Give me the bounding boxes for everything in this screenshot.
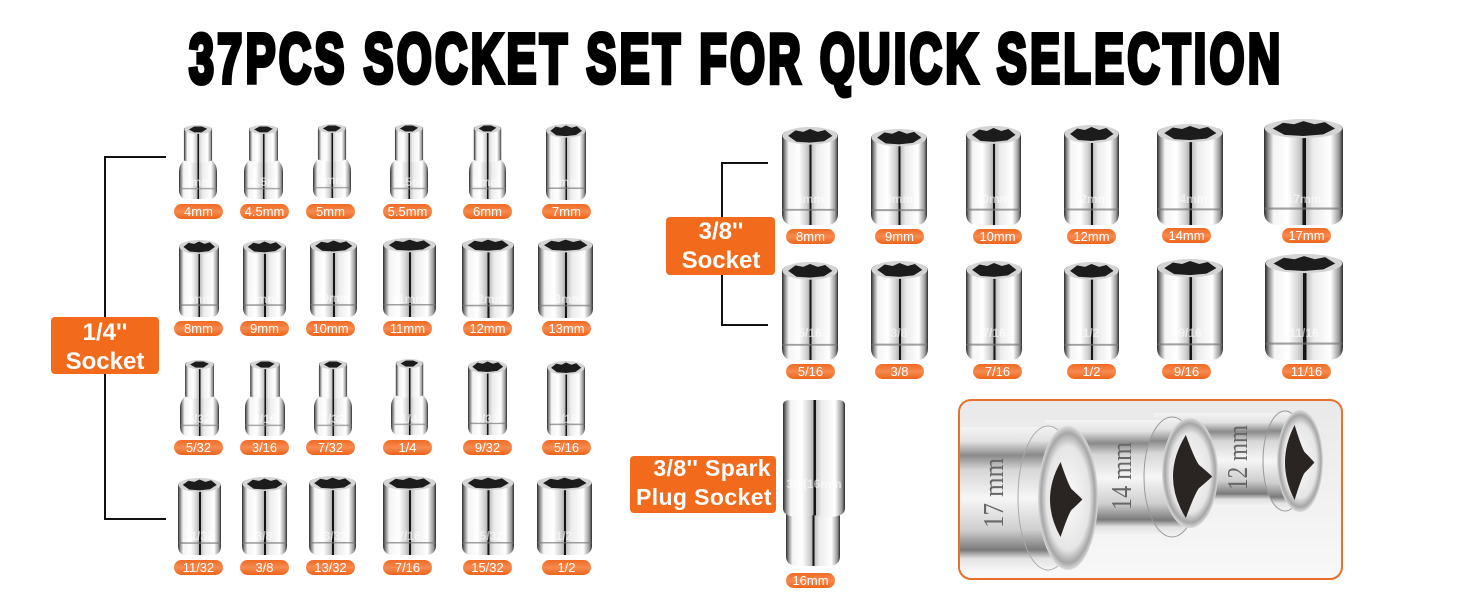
socket 12mm: 12mm <box>471 292 505 306</box>
socket 14mm large: 14mm <box>1173 192 1207 206</box>
socket 5.5mm: 5.5mm <box>388 204 427 219</box>
socket 1/4: 1/4 <box>401 412 418 426</box>
socket 7mm: 7mm <box>552 204 581 219</box>
socket 11mm: 11mm <box>390 321 425 336</box>
socket 3/16: 3/16 <box>252 440 277 455</box>
label: 1/4 inch socket: 1/4'' <box>83 319 127 346</box>
socket 3/8 large: 3/8 <box>891 326 908 340</box>
socket 5/32: 5/32 <box>187 412 211 426</box>
socket 4mm: 4mm <box>184 204 213 219</box>
socket 15/32: 15/32 <box>471 560 504 575</box>
socket 11/32: 11/32 <box>183 560 214 575</box>
socket 8mm large: 8mm <box>796 229 825 244</box>
socket 7/32: 7/32 <box>321 412 345 426</box>
socket 9/16 large: 9/16 <box>1178 326 1202 340</box>
socket 6mm: 6mm <box>473 175 501 189</box>
socket 5/16: 5/16 <box>554 412 578 426</box>
socket 5mm <box>306 124 355 219</box>
socket 9mm large: 9mm <box>885 192 913 206</box>
photo panel: socket close-up <box>959 400 1342 579</box>
socket 10mm: 10mm <box>316 291 350 305</box>
socket 11mm <box>383 238 436 336</box>
close-up socket 17mm <box>960 426 1098 570</box>
socket 13/32: 13/32 <box>317 529 347 543</box>
socket 3/16 <box>240 360 289 455</box>
socket 5/16 large <box>782 262 838 379</box>
socket 7/16 large <box>966 261 1022 379</box>
socket 7mm <box>542 124 591 219</box>
socket 17mm large: 17mm <box>1288 228 1325 243</box>
socket 3/8 large <box>871 261 928 379</box>
label: 1/4 inch socket <box>51 317 159 375</box>
bracket: 3/8 inch group <box>722 163 768 325</box>
socket 5/16 large: 5/16 <box>798 326 822 340</box>
socket 5/16: 5/16 <box>554 440 579 455</box>
socket 3/16: 3/16 <box>253 412 277 426</box>
socket 11/16 large: 11/16 <box>1289 326 1319 340</box>
socket 5/32 <box>174 360 223 455</box>
close-up socket 14mm: 14 mm <box>1107 442 1138 510</box>
socket 9mm <box>240 240 289 336</box>
socket 10mm large: 10mm <box>979 229 1016 244</box>
label: 3/8 inch spark plug socket <box>630 455 776 513</box>
socket 5.5mm <box>383 124 432 219</box>
socket 1/2 large: 1/2 <box>1082 364 1101 379</box>
socket 7mm: 7mm <box>552 175 580 189</box>
socket 1/2 large: 1/2 <box>1083 326 1100 340</box>
socket 11mm: 11mm <box>392 292 426 306</box>
close-up socket 12mm <box>1153 410 1323 512</box>
socket 7/16 large: 7/16 <box>985 364 1010 379</box>
socket 8mm: 8mm <box>185 292 213 306</box>
socket 12mm large <box>1064 125 1119 244</box>
socket 10mm: 10mm <box>312 321 349 336</box>
socket 12mm large: 12mm <box>1074 192 1108 206</box>
label: 1/4 inch socket: Socket <box>66 348 144 375</box>
socket 9mm large <box>871 129 927 244</box>
spark plug socket 16mm: 3/8(16mm <box>786 477 842 491</box>
socket 13mm: 13mm <box>548 321 585 336</box>
socket 3/8: 3/8 <box>255 560 274 575</box>
socket 9/32 <box>463 360 512 455</box>
socket 9mm large: 9mm <box>885 229 914 244</box>
socket 13/32 <box>306 476 356 575</box>
socket 6mm: 6mm <box>473 204 502 219</box>
socket 5.5mm: 5.5m <box>395 175 423 189</box>
socket 1/4: 1/4 <box>398 440 417 455</box>
socket 4mm <box>174 125 223 219</box>
socket 3/8 large: 3/8 <box>890 364 909 379</box>
socket 1/2: 1/2 <box>557 560 576 575</box>
bracket: 1/4 inch group <box>105 157 166 519</box>
socket 9mm: 9mm <box>250 292 278 306</box>
label: 3/8 inch socket: Socket <box>682 247 760 274</box>
socket 4mm: 4mm <box>184 175 212 189</box>
socket 5mm: 5mm <box>318 173 346 187</box>
title: 37PCS SOCKET SET FOR QUICK SELECTION <box>189 21 1280 98</box>
socket 17mm large <box>1264 119 1343 243</box>
socket 3/8: 3/8 <box>256 529 273 543</box>
socket 9/16 large: 9/16 <box>1174 364 1199 379</box>
socket 11/32: 11/32 <box>184 529 214 543</box>
socket 13mm <box>538 238 593 336</box>
socket 9/32: 9/32 <box>475 440 500 455</box>
close-up socket 17mm: 17 mm <box>979 458 1010 528</box>
socket 6mm <box>463 124 512 219</box>
label: 3/8 inch spark plug socket: 3/8'' Spark <box>653 455 771 481</box>
socket 11/16 large: 11/16 <box>1291 364 1322 379</box>
socket 8mm <box>174 240 223 336</box>
socket 11/16 large <box>1265 254 1343 379</box>
socket 10mm <box>306 239 357 336</box>
socket 3/8 <box>240 477 289 575</box>
label: 3/8 inch spark plug socket: Plug Socket <box>636 484 772 510</box>
socket 9/32: 9/32 <box>475 412 499 426</box>
socket 13mm: 13mm <box>548 292 582 306</box>
socket 14mm large <box>1157 124 1223 243</box>
socket 5/32: 5/32 <box>186 440 211 455</box>
close-up socket 12mm: 12 mm <box>1223 425 1254 490</box>
spark plug socket 16mm: 16mm <box>792 573 829 588</box>
socket 7/16 <box>383 476 436 575</box>
socket 7/32: 7/32 <box>318 440 343 455</box>
socket 7/16 large: 7/16 <box>982 326 1006 340</box>
socket 1/4 <box>383 359 432 455</box>
socket 5/16 large: 5/16 <box>798 364 823 379</box>
socket 15/32: 15/32 <box>473 529 503 543</box>
label: 3/8 inch socket <box>666 217 775 275</box>
socket 5mm: 5mm <box>316 204 345 219</box>
socket 14mm large: 14mm <box>1168 228 1205 243</box>
socket 8mm large <box>782 127 838 244</box>
socket 4.5mm: 4.5m <box>250 175 278 189</box>
socket 11/32 <box>174 478 223 575</box>
socket 8mm: 8mm <box>184 321 213 336</box>
socket 7/16: 7/16 <box>395 560 420 575</box>
socket 15/32 <box>462 476 514 575</box>
socket 17mm large: 17mm <box>1287 192 1321 206</box>
socket 12mm: 12mm <box>469 321 506 336</box>
socket 1/2: 1/2 <box>556 529 573 543</box>
socket 1/2 large <box>1064 262 1119 379</box>
socket 10mm large <box>966 126 1022 244</box>
socket 8mm large: 8mm <box>796 192 824 206</box>
socket 10mm large: 10mm <box>976 192 1010 206</box>
socket 4.5mm <box>240 125 289 219</box>
socket 12mm large: 12mm <box>1073 229 1110 244</box>
socket 5/16 <box>542 361 591 455</box>
spark plug socket 16mm <box>783 400 845 588</box>
socket 7/32 <box>306 360 355 455</box>
socket 9/16 large <box>1157 259 1223 379</box>
close-up socket 14mm <box>1045 417 1218 537</box>
socket 1/2 <box>537 476 592 575</box>
socket 4.5mm: 4.5mm <box>245 204 284 219</box>
socket 7/16: 7/16 <box>397 529 421 543</box>
label: 3/8 inch socket: 3/8'' <box>699 218 743 245</box>
socket 13/32: 13/32 <box>314 560 347 575</box>
socket 12mm <box>462 238 514 336</box>
socket 9mm: 9mm <box>250 321 279 336</box>
